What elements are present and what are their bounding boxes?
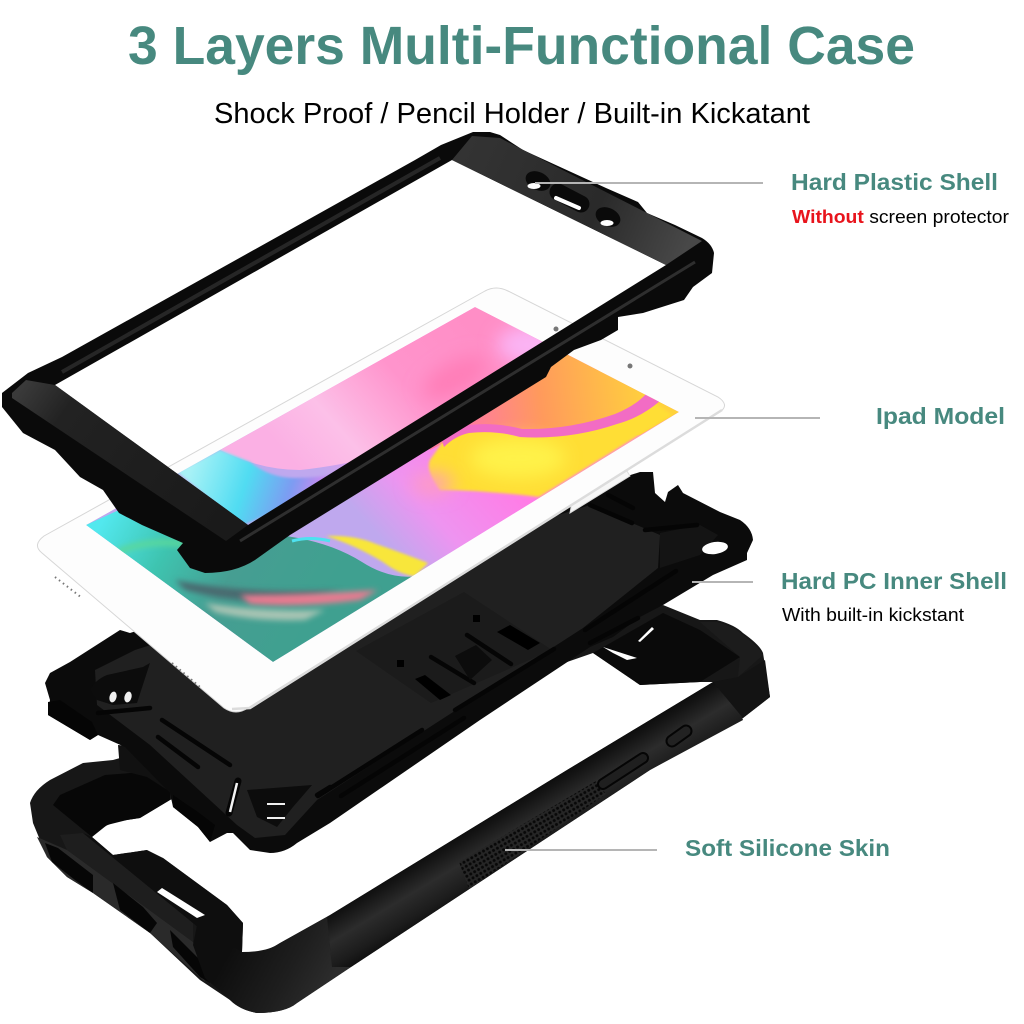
- yellow area: [429, 400, 672, 497]
- lilac top right glow: [492, 324, 542, 365]
- skin silhouette: [30, 605, 770, 1013]
- tablet side edge: [232, 410, 722, 709]
- cyan blue patch: [177, 450, 345, 525]
- speaker dots: [55, 577, 200, 687]
- far interior rim: [700, 622, 763, 677]
- lower band ridge: [240, 262, 695, 541]
- inner lip: [83, 833, 243, 952]
- long side face: [327, 679, 743, 967]
- power button: [672, 731, 686, 741]
- far slot sliver: [603, 647, 637, 660]
- clip tab in skin: [118, 745, 175, 795]
- sliver slot: [229, 781, 238, 813]
- left interior: [53, 770, 170, 837]
- left top band: [60, 833, 193, 942]
- kickstand hinge blocks: [497, 625, 540, 650]
- screen wallpaper: [86, 307, 679, 662]
- edge clip blocks: [48, 700, 215, 842]
- cameras: [554, 326, 632, 368]
- title: 3 Layers Multi-Functional Case: [128, 16, 915, 76]
- kickstand panel: [356, 592, 552, 703]
- layer: hard PC inner shell: [45, 472, 753, 853]
- pink streak: [240, 590, 378, 605]
- front camera hole: [522, 167, 554, 195]
- sensor slot: [556, 192, 581, 208]
- volume button: [603, 758, 643, 784]
- shell frame: [2, 132, 714, 573]
- callout: hard PC inner shell: Hard PC Inner Shell: [781, 568, 1007, 594]
- speaker holes left: [108, 691, 133, 703]
- corner panel top right: [660, 525, 718, 568]
- magenta base: [86, 307, 679, 662]
- orange zone: [420, 350, 679, 450]
- callout: ipad model: Ipad Model: [876, 403, 1005, 429]
- slots: [98, 495, 697, 796]
- bright yellow core: [470, 438, 566, 478]
- far corner cap: [713, 660, 770, 718]
- skin opening: [92, 653, 713, 952]
- callout: soft silicone skin: Soft Silicone Skin: [685, 835, 890, 861]
- callout: hard plastic shell: [535, 169, 1009, 227]
- yellow magenta fade: [412, 474, 452, 494]
- callout: hard PC inner shell: With built-in kickstant: [782, 605, 964, 625]
- dark streak: [175, 580, 340, 601]
- callout: hard plastic shell: Hard Plastic Shell: [791, 169, 998, 195]
- pale streak: [205, 603, 325, 620]
- speaker slots lower: [267, 803, 285, 819]
- layer: soft silicone skin: [30, 605, 770, 1013]
- far interior: [593, 613, 740, 685]
- subtitle: Shock Proof / Pencil Holder / Built-in Kickatant: [214, 98, 810, 130]
- lower yellow swirl: [326, 536, 428, 576]
- magenta swirl: [442, 394, 660, 447]
- side cutouts: [45, 843, 210, 983]
- upper band ridge: [62, 158, 440, 372]
- layer: tablet: [37, 288, 725, 712]
- hot pink glow: [424, 356, 484, 401]
- upper pink zone: [220, 307, 600, 470]
- camera hole: [701, 540, 729, 556]
- green stripe: [118, 543, 190, 552]
- left side face: [37, 837, 205, 982]
- grip texture: [459, 781, 606, 889]
- near corner piece: [193, 917, 351, 1013]
- shell silhouette: [45, 472, 753, 853]
- lower teal area: [86, 505, 418, 662]
- camera recess left: [90, 663, 150, 705]
- tablet body: [37, 288, 725, 712]
- cyan edge line: [292, 538, 330, 541]
- tablet side key: [570, 468, 630, 513]
- layer: hard plastic shell: [2, 132, 714, 573]
- left band face: [12, 380, 248, 541]
- back plate: [95, 505, 660, 838]
- callout: hard plastic shell: Without screen protector: [792, 207, 1009, 227]
- lip slot: [157, 888, 205, 918]
- recess lower: [247, 785, 312, 827]
- far small sliver: [638, 627, 654, 642]
- callout: hard PC inner shell: [692, 568, 1007, 625]
- top band face: [452, 136, 702, 265]
- rear camera hole: [592, 203, 624, 231]
